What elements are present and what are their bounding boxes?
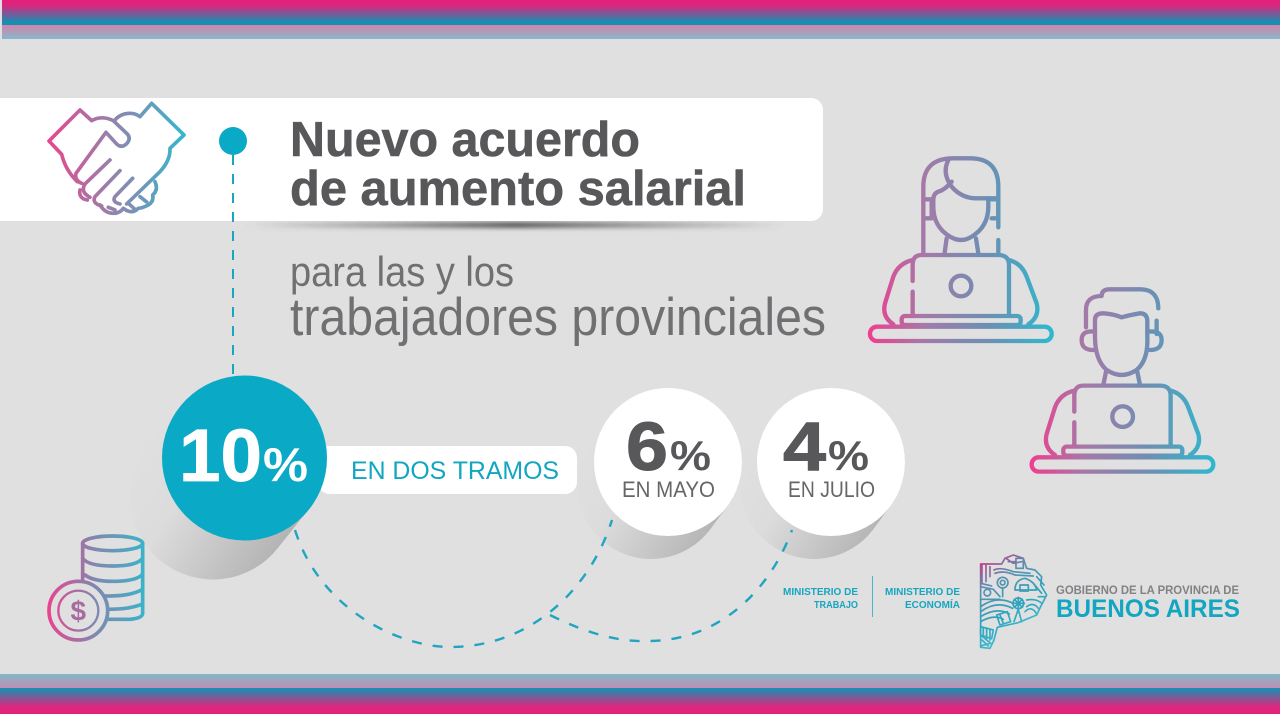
circle: 10%	[162, 376, 327, 540]
circle: 6% en mayo: EN MAYO	[622, 477, 715, 502]
pill: en dos tramos: EN DOS TRAMOS	[351, 457, 559, 485]
logo: government wordmark	[1056, 583, 1240, 623]
ministries: ECONOMÍA	[905, 598, 960, 611]
man body and laptop	[1032, 386, 1213, 472]
connector: dashed curve to 6%	[295, 520, 612, 647]
subtitle	[290, 248, 826, 347]
banner shadow	[245, 222, 785, 228]
logo: province map	[981, 555, 1047, 648]
bottom colour band	[0, 674, 1280, 714]
circle: 4% en julio	[757, 388, 905, 536]
icon: coins: $	[71, 596, 87, 627]
shadow: 6% circle	[651, 462, 668, 485]
circle: 10%: %	[263, 438, 308, 491]
ministries	[783, 576, 960, 617]
shadow: 10% circle	[213, 458, 244, 497]
marker dot	[219, 127, 247, 155]
title	[290, 113, 746, 216]
panel: white title banner	[0, 98, 823, 221]
circle: 4% en julio: %	[828, 432, 869, 479]
connector: dashed curve to 4%	[550, 530, 792, 641]
pill: en dos tramos	[318, 446, 577, 494]
icon: man at laptop	[1032, 289, 1213, 472]
logo: government wordmark: GOBIERNO DE LA PROVINCIA DE	[1056, 583, 1239, 597]
connector: dashed line from dot to 10% circle	[232, 155, 234, 375]
icon: woman at laptop	[870, 158, 1052, 341]
ministries: MINISTERIO DE	[885, 586, 960, 598]
circle: 4% en julio: EN JULIO	[788, 477, 875, 502]
circle: 6% en mayo: 6	[626, 408, 668, 485]
subtitle: trabajadores provinciales	[290, 288, 826, 347]
ministries: MINISTERIO DE	[783, 586, 858, 598]
icon: handshake	[49, 103, 184, 213]
subtitle: para las y los	[290, 248, 514, 295]
shadow: 4% circle	[814, 462, 831, 485]
circle: 6% en mayo: %	[670, 432, 711, 479]
title: Nuevo acuerdo	[290, 113, 640, 167]
ministries: TRABAJO	[814, 599, 858, 611]
man head	[1082, 289, 1162, 385]
logo: government wordmark: BUENOS AIRES	[1056, 595, 1240, 623]
circle: 10%: 10	[179, 414, 262, 497]
title: de aumento salarial	[290, 162, 746, 216]
top colour band	[2, 0, 1280, 39]
circle: 4% en julio: 4	[783, 408, 826, 485]
icon: coins	[49, 536, 143, 640]
circle: 6% en mayo	[594, 388, 742, 536]
